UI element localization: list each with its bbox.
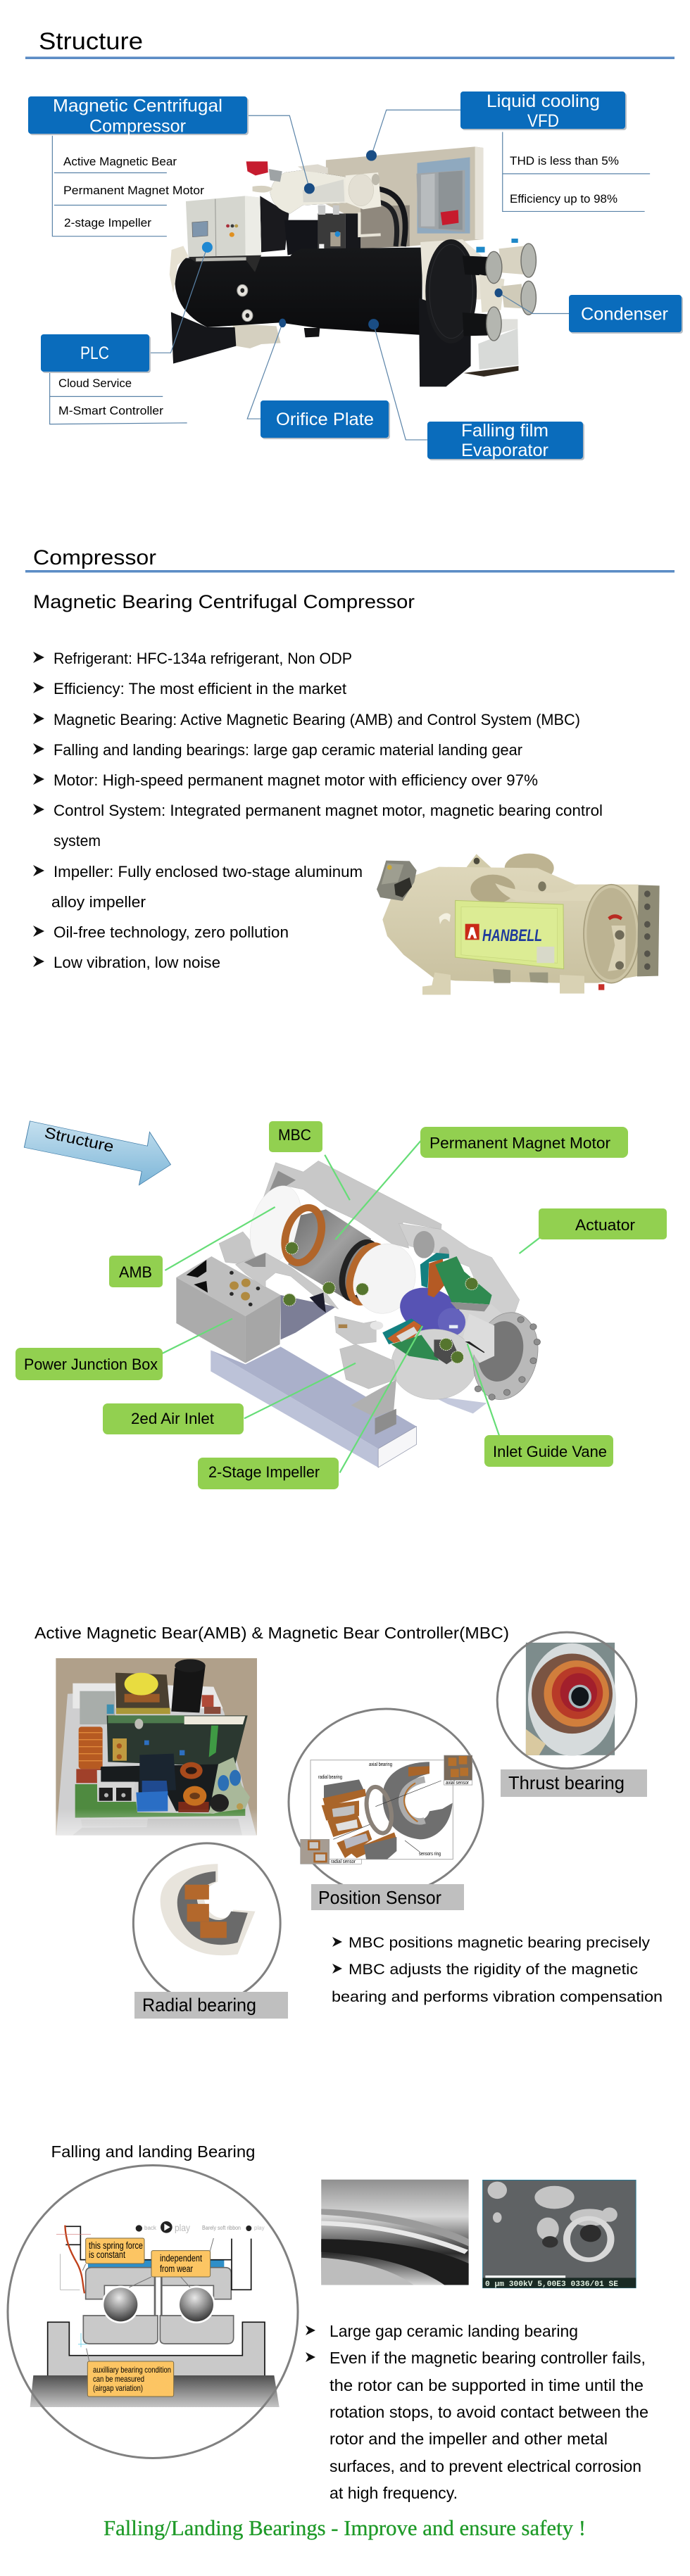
callout: Magnetic Centrifugal Compressor [28, 96, 249, 137]
label: Actuator: Actuator [575, 1216, 635, 1234]
bullet list: landing bearing benefits: Large gap ceramic landing bearing [330, 2322, 578, 2340]
circle: Position Sensor: sensors ring [419, 1852, 441, 1857]
circular bearing diagram: (airgap variation) [93, 2383, 143, 2393]
heading: Falling and landing Bearing: Falling and landing Bearing [51, 2142, 256, 2161]
circle: Position Sensor: axial sensor [446, 1781, 470, 1786]
list: VFD features [510, 154, 619, 206]
circular bearing diagram: independent [160, 2253, 202, 2264]
arrow: Structure: Structure [43, 1123, 115, 1156]
bullet list: landing bearing benefits: rotation stops, to avoid contact between the [330, 2403, 648, 2421]
callout: Condenser: Condenser [581, 304, 668, 324]
bullet list: compressor specifications: Falling and landing bearings: large gap ceramic material landing gear [54, 741, 522, 759]
label: Power Junction Box [15, 1348, 163, 1380]
label: AMB [109, 1256, 163, 1287]
label: Inlet Guide Vane [484, 1435, 613, 1467]
label: Power Junction Box: Power Junction Box [24, 1356, 158, 1373]
bullet list: compressor specifications: alloy impeller [51, 893, 146, 911]
label: 2-Stage Impeller: 2-Stage Impeller [208, 1463, 320, 1481]
callout: Liquid cooling VFD: VFD [527, 111, 559, 131]
callout: Orifice Plate: Orifice Plate [276, 410, 374, 429]
arrow: Structure [24, 1121, 170, 1185]
bullet list: landing bearing benefits: Even if the magnetic bearing controller fails, [330, 2349, 646, 2367]
bullet list: compressor specifications: Low vibration, low noise [54, 954, 220, 971]
callout: Magnetic Centrifugal Compressor: Compressor [89, 117, 186, 137]
heading: Active Magnetic Bear and Controller: Active Magnetic Bear(AMB) & Magnetic Bear Controller(MBC) [34, 1624, 509, 1642]
callout: Falling film Evaporator: Evaporator [461, 441, 548, 460]
callout: Orifice Plate [261, 400, 390, 439]
label: 2ed Air Inlet: 2ed Air Inlet [131, 1410, 214, 1427]
leader lines and marker dots for chiller callouts [50, 110, 650, 440]
bullet list: compressor specifications: Impeller: Fully enclosed two-stage aluminum [54, 863, 363, 880]
callout: Falling film Evaporator [427, 421, 584, 460]
list: PLC features [58, 377, 163, 417]
list: compressor features: 2-stage Impeller [64, 216, 151, 229]
circular bearing diagram [8, 2165, 298, 2458]
list: VFD features: Efficiency up to 98% [510, 192, 617, 206]
bullet list: MBC functions: MBC positions magnetic bearing precisely [349, 1935, 651, 1951]
bullet list: MBC functions [332, 1935, 663, 2005]
label: Inlet Guide Vane: Inlet Guide Vane [493, 1443, 607, 1460]
circular bearing diagram: this spring force [89, 2240, 143, 2251]
circular bearing diagram: auxilliary bearing condition [93, 2365, 171, 2375]
circle: Position Sensor: radial sensor [331, 1860, 356, 1864]
closing tagline: Falling/Landing Bearings - Improve and ensure safety ! [104, 2515, 586, 2540]
callout: Liquid cooling VFD [460, 91, 627, 131]
Hanbell compressor illustration [377, 854, 660, 995]
bullet list: compressor specifications: Magnetic Bearing: Active Magnetic Bearing (AMB) and Control System (MBC) [54, 711, 580, 728]
photo: bearing raceway surface [321, 2180, 469, 2285]
Hanbell compressor illustration: HANBELL [482, 926, 542, 945]
callout: Liquid cooling VFD: Liquid cooling [487, 91, 600, 111]
label: Actuator [539, 1208, 667, 1239]
list: compressor features [63, 155, 204, 229]
circle: Thrust bearing [497, 1632, 647, 1797]
circular bearing diagram: can be measured [93, 2374, 144, 2384]
section heading: Structure: Structure [39, 28, 143, 55]
photo: electron microscope corrosion image: 0 µm 300kV 5,00E3 0336/01 SE [485, 2280, 618, 2289]
circular bearing diagram: play [175, 2222, 190, 2233]
label: MBC [269, 1121, 322, 1152]
callout: PLC [41, 334, 151, 373]
label: Permanent Magnet Motor [420, 1127, 628, 1158]
bullet list: compressor specifications: system [54, 832, 101, 850]
bullet list: compressor specifications: Oil-free technology, zero pollution [54, 923, 289, 941]
circular bearing diagram: Barely soft ribbon [202, 2225, 241, 2231]
callout: Condenser [569, 295, 683, 334]
list: VFD features: THD is less than 5% [510, 154, 619, 168]
circular bearing diagram: back [144, 2225, 157, 2231]
chiller illustration [170, 146, 536, 386]
bullet list: landing bearing benefits [306, 2322, 648, 2502]
callout: Magnetic Centrifugal Compressor: Magnetic Centrifugal [53, 96, 222, 115]
bullet list: MBC functions: bearing and performs vibration compensation [332, 1989, 663, 2005]
circle: Radial bearing [133, 1843, 288, 2019]
bullet list: landing bearing benefits: rotor and the impeller and other metal [330, 2430, 608, 2448]
bullet list: compressor specifications: Motor: High-speed permanent magnet motor with efficiency over 97% [54, 771, 538, 789]
bullet list: compressor specifications: Refrigerant: HFC-134a refrigerant, Non ODP [54, 650, 352, 667]
label: MBC: MBC [278, 1126, 311, 1144]
list: compressor features: Permanent Magnet Motor [63, 184, 204, 197]
bullet list: landing bearing benefits: the rotor can be supported in time until the [330, 2376, 644, 2394]
label: 2ed Air Inlet [103, 1403, 244, 1434]
circle: Position Sensor: Position Sensor [318, 1887, 441, 1908]
compressor cutaway illustration [161, 1141, 546, 1472]
list: PLC features: Cloud Service [58, 377, 132, 390]
bullet list: compressor specifications: Efficiency: The most efficient in the market [54, 680, 346, 697]
circle: Position Sensor: radial bearing [318, 1775, 342, 1780]
photo: MBC circuit board [56, 1658, 257, 1835]
label: AMB: AMB [119, 1263, 152, 1281]
section heading: Compressor: Compressor [33, 546, 156, 569]
circular bearing diagram: is constant [89, 2249, 125, 2260]
bullet list: compressor specifications [33, 650, 603, 971]
list: compressor features: Active Magnetic Bear [63, 155, 177, 168]
section heading: Structure [25, 28, 675, 59]
circle: Position Sensor: axial bearing [369, 1762, 392, 1767]
label: 2-Stage Impeller [198, 1458, 339, 1489]
circle: Position Sensor [289, 1709, 483, 1910]
section heading: Compressor [25, 546, 675, 573]
circular bearing diagram: play [254, 2225, 265, 2231]
bullet list: landing bearing benefits: surfaces, and to prevent electrical corrosion [330, 2457, 641, 2475]
callout: PLC: PLC [80, 343, 109, 363]
circle: Thrust bearing: Thrust bearing [508, 1772, 625, 1793]
list: PLC features: M-Smart Controller [58, 404, 163, 417]
subheading: Magnetic Bearing Centrifugal Compressor: Magnetic Bearing Centrifugal Compressor [33, 591, 415, 612]
bullet list: MBC functions: MBC adjusts the rigidity of the magnetic [349, 1962, 638, 1978]
circular bearing diagram: from wear [160, 2264, 193, 2274]
bullet list: landing bearing benefits: at high frequency. [330, 2484, 458, 2502]
bullet list: compressor specifications: Control System: Integrated permanent magnet motor, magnetic bearing control [54, 802, 603, 819]
circle: Radial bearing: Radial bearing [142, 1995, 256, 2016]
label: Permanent Magnet Motor: Permanent Magnet Motor [429, 1135, 610, 1151]
photo: electron microscope corrosion image [483, 2180, 636, 2289]
callout: Falling film Evaporator: Falling film [461, 421, 548, 441]
